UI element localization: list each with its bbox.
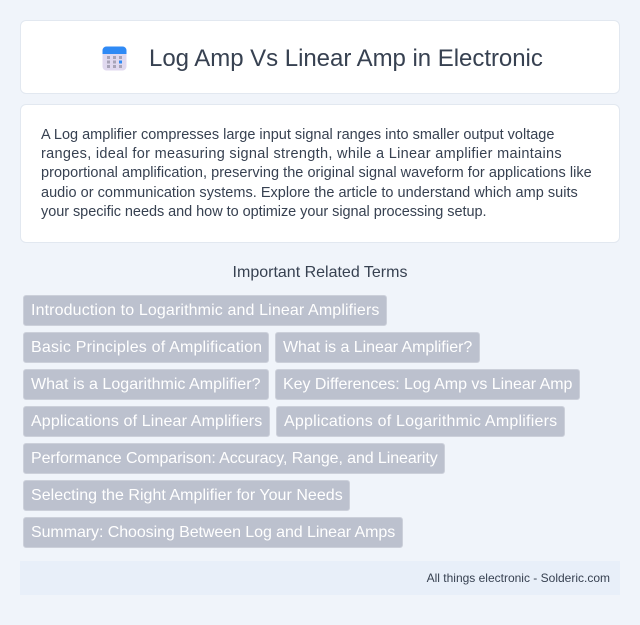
chip bbox=[23, 295, 387, 326]
chip: Introduction to Logarithmic and Linear Amplifiers bbox=[31, 302, 380, 319]
footer text: All things electronic - Solderic.com bbox=[427, 571, 610, 585]
chip: Basic Principles of Amplification bbox=[31, 339, 262, 356]
chip bbox=[23, 406, 270, 437]
chip: Applications of Linear Amplifiers bbox=[31, 413, 262, 430]
chip bbox=[275, 332, 480, 363]
intro paragraph: proportional amplification, preserving the original signal waveform for applications like bbox=[41, 165, 592, 181]
intro paragraph: A Log amplifier compresses large input signal ranges into smaller output voltage bbox=[41, 127, 554, 143]
footer bar bbox=[20, 561, 620, 595]
chip: What is a Logarithmic Amplifier? bbox=[31, 376, 260, 393]
intro paragraph: ranges, ideal for measuring signal strength, while a Linear amplifier maintains bbox=[41, 146, 562, 162]
chip bbox=[23, 443, 445, 474]
header panel bbox=[20, 20, 620, 94]
chip bbox=[23, 480, 350, 511]
intro paragraph bbox=[41, 127, 592, 220]
chip: Selecting the Right Amplifier for Your Needs bbox=[31, 487, 343, 504]
intro text panel bbox=[20, 104, 620, 243]
chip bbox=[23, 332, 269, 363]
chip: Summary: Choosing Between Log and Linear Amps bbox=[31, 524, 395, 541]
chip: What is a Linear Amplifier? bbox=[283, 339, 472, 356]
chip: Key Differences: Log Amp vs Linear Amp bbox=[283, 376, 572, 393]
chip: Applications of Logarithmic Amplifiers bbox=[284, 413, 557, 430]
title: Log Amp Vs Linear Amp in Electronic bbox=[149, 45, 543, 72]
section heading: Important Related Terms bbox=[233, 264, 407, 281]
chip bbox=[23, 517, 403, 548]
intro paragraph: your specific needs and how to optimize your signal processing setup. bbox=[41, 204, 486, 220]
chip bbox=[276, 406, 565, 437]
chip bbox=[275, 369, 580, 400]
intro paragraph: audio or communication systems. Explore the article to understand which amp suits bbox=[41, 185, 578, 201]
chip: Performance Comparison: Accuracy, Range, and Linearity bbox=[31, 450, 438, 467]
icon: calendar grid bbox=[102, 46, 126, 70]
related terms chips bbox=[23, 295, 580, 548]
chip bbox=[23, 369, 269, 400]
